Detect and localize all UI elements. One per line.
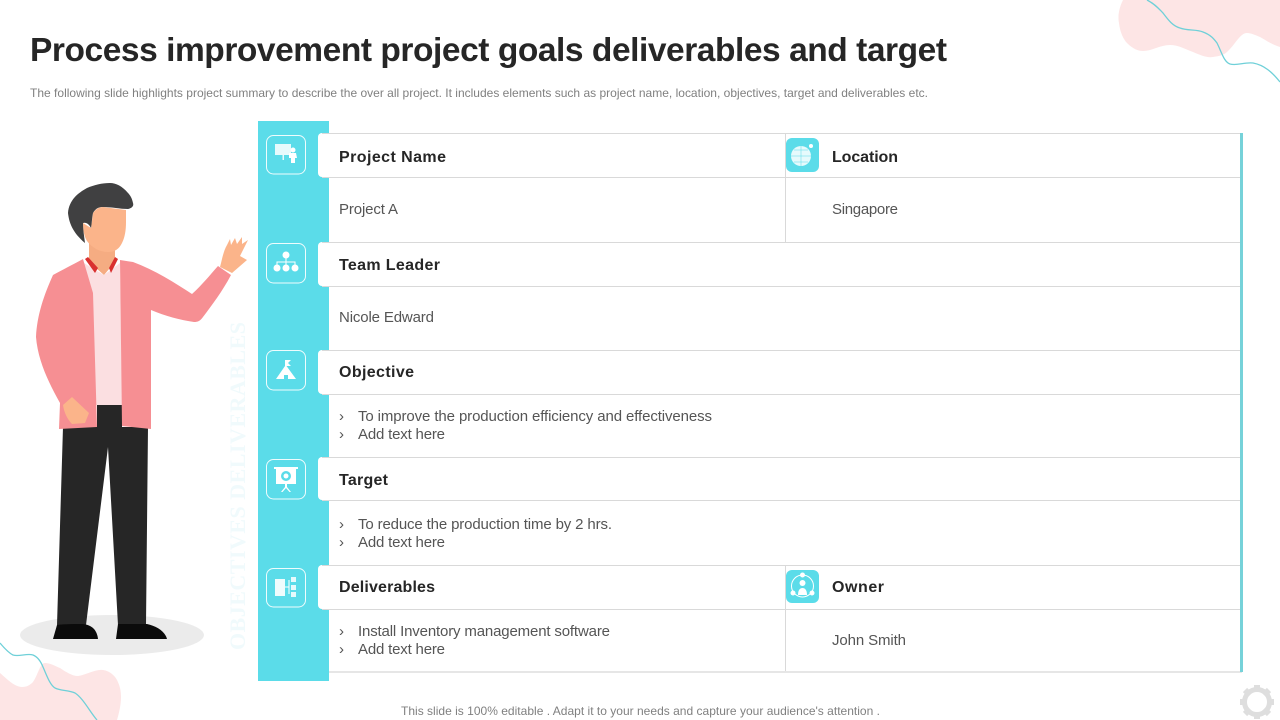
decoration: top right blob and wave [1118, 0, 1280, 82]
floor shadow [20, 615, 204, 655]
row: project name and location [318, 133, 1241, 242]
title: Process improvement project goals deliverables and target [30, 32, 947, 69]
row: objective: To improve the production efficiency and effectiveness [358, 408, 712, 425]
icon: owner network [786, 570, 819, 603]
row: objective: › [339, 426, 344, 443]
row: project name and location: Project Name [339, 149, 446, 166]
decoration: bottom left blob and wave [0, 643, 121, 720]
row: deliverables and owner: Add text here [358, 641, 445, 658]
icon: presenter at board [266, 136, 306, 174]
row: objective [318, 350, 1241, 443]
collar [85, 257, 118, 273]
raised hand [220, 237, 248, 273]
row: team leader: Team Leader [339, 257, 440, 274]
illustration: presenter figure [20, 183, 248, 655]
row: target: Target [339, 472, 389, 489]
row: target: To reduce the production time by 2 hrs. [358, 516, 612, 533]
lower hand [63, 397, 89, 424]
row: target [318, 457, 1241, 551]
row: deliverables and owner: Deliverables [339, 579, 435, 596]
trousers [57, 405, 148, 625]
subtitle: The following slide highlights project summary to describe the over all project. It includes elements such as project name, location, objectives, target and deliverables etc. [30, 86, 928, 100]
row: target: › [339, 516, 344, 533]
row: objective: › [339, 408, 344, 425]
sidebar: cyan band [258, 121, 329, 681]
icon: mountain flag [266, 350, 306, 390]
row: objective: Add text here [358, 426, 445, 443]
row: project name and location: Project A [339, 201, 398, 218]
shoes [53, 624, 167, 639]
row: deliverables and owner: › [339, 623, 344, 640]
row: deliverables and owner: › [339, 641, 344, 658]
shirt [84, 263, 122, 405]
icon: settings gear [1240, 685, 1274, 719]
row: objective: Objective [339, 364, 414, 381]
icon: target presentation board [266, 460, 306, 499]
icon: checklist deliverables [266, 568, 306, 607]
icon: hierarchy [266, 244, 306, 283]
row: deliverables and owner: Owner [832, 579, 884, 596]
row: team leader: Nicole Edward [339, 309, 434, 326]
face [83, 207, 126, 252]
row: deliverables and owner: John Smith [832, 632, 906, 649]
neck [89, 243, 115, 275]
icon: globe location [786, 138, 819, 172]
table bottom border [329, 671, 1242, 673]
jacket [36, 259, 231, 429]
row: target: › [339, 534, 344, 551]
row: project name and location: Location [832, 149, 898, 166]
vertical watermark text: OBJECTIVES DELIVERABLES [225, 322, 250, 650]
row: team leader [318, 242, 1241, 326]
table: project summary [318, 133, 1243, 673]
row: deliverables and owner: Install Inventory management software [358, 623, 610, 640]
row: deliverables and owner [318, 565, 1241, 671]
row: project name and location: Singapore [832, 201, 898, 218]
row: target: Add text here [358, 534, 445, 551]
table right border [1240, 133, 1243, 672]
footer note: This slide is 100% editable . Adapt it to your needs and capture your audience's attention . [401, 704, 880, 718]
hair [68, 183, 133, 243]
